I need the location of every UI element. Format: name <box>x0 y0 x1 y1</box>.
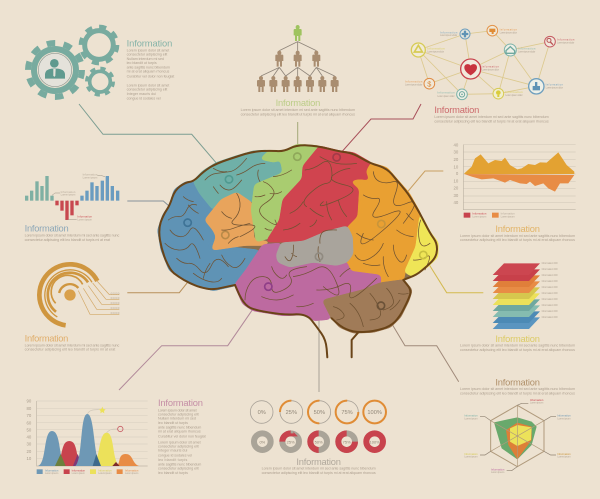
text block: network <box>434 115 549 123</box>
axis labels <box>27 399 32 461</box>
panel: org chart <box>241 25 355 116</box>
text block: area chart: Lorem ipsum dolor sit amet interdum mi sed ante sagittis nunc bibendum <box>460 234 575 238</box>
icon: green person <box>294 25 302 41</box>
text block: percentage rings: Lorem ipsum dolor sit amet interdum mi sed ante sagittis nunc bibendum <box>262 467 376 471</box>
radar labels: Information <box>530 398 544 402</box>
text block: network: Lorem ipsum dolor sit amet interdum mi sed ante sagittis nunc bibendum <box>434 115 549 119</box>
text block: bell chart: ante sagittis nunc bibendum <box>158 425 201 429</box>
donut percentages: 25% <box>287 439 295 444</box>
node labels: Information <box>437 91 455 95</box>
text block: percentage rings <box>262 467 376 475</box>
text block: bell chart: leo blandit turpis <box>158 458 187 462</box>
node labels: Lorem ipsum dolor <box>427 49 444 53</box>
ring percentages: 100% <box>367 410 382 416</box>
axis labels: 10 <box>454 178 459 183</box>
axis labels <box>454 142 459 205</box>
legend: Information <box>72 468 86 472</box>
node labels: Information <box>405 79 423 83</box>
text block: bell chart: Lorem ipsum dolor sit amet <box>158 408 197 412</box>
radial labels: 00000 <box>111 306 120 310</box>
text block: bell chart: Integer mauris dui <box>158 449 188 453</box>
stack labels: Information 000 <box>542 285 558 289</box>
axis labels: 50 <box>27 427 32 432</box>
heading: bell chart: Information <box>158 398 203 408</box>
text block: bell chart: consectetur adipiscing elit <box>158 467 199 471</box>
upper area <box>464 152 574 174</box>
axis labels: 80 <box>27 406 32 411</box>
region: yellow lobe <box>404 212 439 277</box>
legend <box>37 468 139 475</box>
red bars <box>55 201 79 220</box>
stack labels: Information 000 <box>542 297 558 301</box>
legend <box>464 212 515 218</box>
text block: network: consectetur adipiscing elit leo blandit ut turpis mi at erat aliquam rhoncus <box>434 119 549 123</box>
text block: gears: Integer mauris dui <box>127 92 156 96</box>
axis labels: 90 <box>27 399 32 404</box>
radial labels: 00000 <box>111 296 120 300</box>
network links <box>418 31 550 94</box>
axis labels: 30 <box>27 442 32 447</box>
panel: bar chart <box>25 173 120 352</box>
panel: network <box>405 25 575 123</box>
text block: bar chart: Lorem ipsum dolor sit amet interdum mi sed ante sagittis nunc <box>25 234 119 238</box>
text block: bell chart: mi at erat aliquam rhoncus <box>158 430 201 434</box>
axis labels: 60 <box>27 420 32 425</box>
node: house <box>504 44 516 56</box>
axis labels: 30 <box>454 193 459 198</box>
region: brown lobe <box>322 279 413 333</box>
stack labels: Information 000 <box>542 261 558 265</box>
node labels: Lorem ipsum dolor <box>437 94 455 98</box>
stack labels: Information 000 <box>542 291 558 295</box>
legend: Information <box>472 212 487 216</box>
layered stack chart <box>493 263 540 329</box>
bar annotations: Lorem ipsum <box>77 217 93 221</box>
axis labels: 10 <box>454 164 459 169</box>
text block: radial chart: Lorem ipsum dolor sit amet interdum mi sed ante sagittis nunc <box>25 343 119 347</box>
text block: percentage rings: consectetur adipiscing elit leo blandit ut turpis mi at erat aliquam rhoncus <box>262 471 376 475</box>
node labels: Information <box>482 65 500 69</box>
node labels: Information <box>440 30 458 34</box>
panel: bell curve chart <box>27 398 206 475</box>
node labels: Information <box>505 90 523 94</box>
text block: bell chart: congue id sodales vel <box>158 454 192 458</box>
text block: bell chart: Curabitur vel dolor non feugiat <box>158 434 206 438</box>
node: bulb <box>493 88 504 99</box>
chart grid <box>37 401 148 466</box>
icon: star marker <box>87 407 118 433</box>
heading: stack chart: Information <box>495 334 540 344</box>
text block: bell chart: leo blandit ut turpis <box>158 471 188 475</box>
radar labels: Lorem ipsum <box>464 416 478 420</box>
node labels: Information <box>500 27 518 31</box>
radar labels: Information <box>464 414 478 418</box>
text block: stack chart <box>460 344 575 352</box>
blue bars <box>80 176 119 201</box>
node labels: Information <box>557 38 575 42</box>
legend: Lorem ipsum <box>72 471 86 475</box>
org chart links <box>261 42 335 76</box>
legend: Lorem ipsum <box>472 214 487 218</box>
panel: gears <box>28 27 174 100</box>
region: blue lobe <box>157 181 261 291</box>
text block: bell chart: ante sagittis nunc bibendum <box>158 462 201 466</box>
text block: bell chart: consectetur adipiscing elit <box>158 444 199 448</box>
brain markers <box>184 153 427 309</box>
radar labels: Lorem ipsum <box>464 455 478 459</box>
text block: gears: consectetur adipiscing elit <box>127 88 167 92</box>
axis labels: 40 <box>27 435 32 440</box>
legend: Information <box>98 468 112 472</box>
node: dollar: $ <box>427 79 431 88</box>
heading: radar chart: Information <box>495 377 540 387</box>
text block: bell chart: Nullam interdum mi sed <box>158 417 196 421</box>
stack labels: Information 000 <box>542 273 558 277</box>
brain underlay <box>158 145 437 332</box>
icons: brown people <box>257 51 339 92</box>
panel: percentage rings <box>250 401 386 475</box>
node: thumb down <box>487 25 498 36</box>
legend: Lorem ipsum <box>98 471 112 475</box>
axis labels: 70 <box>27 413 32 418</box>
heading: network: Information <box>434 105 479 115</box>
radar labels: Information <box>464 452 478 456</box>
node labels: Lorem ipsum dolor <box>505 93 523 97</box>
node: recycle <box>411 43 425 57</box>
node: search <box>545 36 555 47</box>
radial labels <box>111 291 120 315</box>
text block: bell chart: consectetur adipiscing elit <box>158 412 199 416</box>
node labels: Lorem ipsum dolor <box>546 86 563 90</box>
donut percentages: 75% <box>343 439 351 444</box>
teal bars <box>25 176 54 201</box>
text block: gears: mi at erat aliquam rhoncus <box>127 70 169 74</box>
axis labels: 0 <box>456 171 459 176</box>
text block: gears: consectetur adipiscing elit <box>127 53 167 57</box>
lower area <box>464 174 574 192</box>
bell curves <box>38 414 139 466</box>
text block: gears: ante sagittis nunc bibendum <box>127 66 170 70</box>
radar areas <box>494 417 537 459</box>
text block: gears: Curabitur vel dolor non feugiat <box>127 74 174 78</box>
text block: area chart: consectetur adipiscing elit leo blandit ut turpis mi at erat aliquam rhoncus <box>460 238 575 242</box>
text block: stack chart: Lorem ipsum dolor sit amet interdum mi sed ante sagittis nunc bibendum <box>460 344 575 348</box>
region: orange lobe <box>346 162 421 284</box>
node labels: Information <box>518 46 536 50</box>
bar annotations <box>52 173 105 221</box>
node: target <box>457 89 467 100</box>
heading: org chart: Information <box>276 98 320 108</box>
stack labels: Information 000 <box>542 309 558 313</box>
radar labels: Lorem ipsum <box>557 455 571 459</box>
region: green lobe <box>251 144 322 242</box>
axis labels: 40 <box>454 200 459 205</box>
icon: large gear with person <box>28 43 82 97</box>
text block: gears: Nullam interdum mi sed <box>127 57 164 61</box>
donut percentages: 50% <box>315 439 323 444</box>
node: heart <box>461 59 481 79</box>
text block: radar chart: Lorem ipsum dolor sit amet interdum mi sed ante sagittis nunc bibendum <box>460 387 575 391</box>
panel: area chart <box>454 142 576 352</box>
node labels: Lorem ipsum dolor <box>557 41 574 45</box>
radar grid <box>480 403 556 471</box>
radar labels: Information <box>557 452 571 456</box>
stack labels: Information 000 <box>542 315 558 319</box>
bar annotations: Lorem ipsum <box>61 193 76 197</box>
radar labels: Lorem ipsum <box>491 470 505 474</box>
radar labels: Information <box>491 467 505 471</box>
node labels: Lorem ipsum dolor <box>500 30 517 34</box>
axis labels: 20 <box>454 157 459 162</box>
region: teal lobe <box>193 150 284 211</box>
legend: Lorem ipsum <box>125 471 139 475</box>
ring percentages <box>258 410 382 416</box>
text block: radar chart <box>460 387 575 395</box>
donut percentages: 0% <box>259 439 266 444</box>
brain <box>157 144 439 357</box>
text block: org chart <box>241 108 355 116</box>
stack labels: Information 000 <box>542 303 558 307</box>
text block: gears: Lorem ipsum dolor sit amet <box>127 49 169 53</box>
text block: bar chart: consectetur adipiscing elit leo blandit ut turpis mi at erat <box>25 238 110 242</box>
radial chart <box>39 264 119 325</box>
region: light orange lobe <box>204 192 273 251</box>
stack labels: Information 000 <box>542 279 558 283</box>
radial labels: 00000 <box>111 311 120 315</box>
brain outline <box>159 145 437 357</box>
legend: Information <box>125 468 139 472</box>
bar annotations: Information <box>61 190 76 194</box>
radar labels <box>464 398 571 474</box>
text block: stack chart: consectetur adipiscing elit leo blandit ut turpis mi at erat aliquam rhoncus <box>460 348 575 352</box>
heading: area chart: Information <box>495 224 540 234</box>
region: purple lobe <box>234 243 381 321</box>
region: red lobe <box>265 146 373 242</box>
text block: radial chart: consectetur adipiscing elit leo blandit ut turpis mi at erat <box>25 348 115 352</box>
brain folds <box>165 157 430 327</box>
ring percentages: 75% <box>341 410 353 416</box>
node: plus <box>460 29 470 39</box>
text block: radar chart: consectetur adipiscing elit leo blandit ut turpis mi at erat aliquam rhoncus <box>460 391 575 395</box>
heading: percentage rings: Information <box>296 457 341 467</box>
text block: bar chart <box>25 234 119 242</box>
node labels: Information <box>427 46 445 50</box>
radial labels: 00000 <box>111 301 120 305</box>
node labels: Lorem ipsum dolor <box>482 68 499 72</box>
ring percentages: 0% <box>258 410 266 416</box>
icon: upper gear <box>81 27 117 63</box>
text block: bell chart <box>158 408 206 475</box>
legend: Information <box>501 212 515 216</box>
bar annotations: Information <box>77 215 93 219</box>
icon: circle marker <box>118 426 123 432</box>
axis labels: 30 <box>454 150 459 155</box>
text block: area chart <box>460 234 575 242</box>
legend: Lorem ipsum <box>501 214 515 218</box>
text block: bell chart: leo blandit ut turpis <box>158 421 188 425</box>
stack labels <box>542 261 558 319</box>
text block: org chart: Lorem ipsum dolor sit amet interdum mi sed ante sagittis nunc bibendum <box>241 108 355 112</box>
connector lines <box>79 104 483 392</box>
legend: Lorem ipsum <box>45 471 59 475</box>
text block: gears: Lorem ipsum dolor sit amet <box>127 83 169 87</box>
node labels: Lorem ipsum dolor <box>405 83 422 87</box>
text block: org chart: consectetur adipiscing elit leo blandit ut turpis mi at erat aliquam rhoncus <box>241 112 355 116</box>
panel: radar chart <box>460 377 575 474</box>
radial labels: 00000 <box>111 291 120 295</box>
ring percentages: 25% <box>286 410 297 416</box>
region: gray lobe <box>276 226 353 267</box>
stack labels: Information 000 <box>542 267 558 271</box>
node: dollar <box>424 78 435 89</box>
node labels: Lorem ipsum dolor <box>440 33 457 37</box>
chart grid <box>463 145 576 210</box>
outline rings <box>250 401 386 423</box>
radar labels: Lorem ipsum <box>557 416 571 420</box>
bar annotations: Lorem ipsum <box>83 175 98 179</box>
ring percentages: 50% <box>314 410 325 416</box>
axis labels: 40 <box>454 142 459 147</box>
donut charts <box>254 433 383 450</box>
radar labels: Information <box>557 414 571 418</box>
heading: radial chart: Information <box>25 334 68 344</box>
axis labels: 10 <box>27 456 32 461</box>
heading: gears: Information <box>127 39 172 49</box>
legend: Information <box>45 468 59 472</box>
donut percentages <box>259 439 380 444</box>
text block: bell chart: Lorem ipsum dolor sit amet <box>158 440 201 444</box>
node: thumb up <box>529 79 544 94</box>
node labels <box>405 27 575 98</box>
radar labels: Lorem ipsum <box>530 401 544 405</box>
donut percentages: 100% <box>370 439 380 444</box>
bar annotations: Information <box>83 173 98 177</box>
axis labels: 20 <box>454 186 459 191</box>
text block: gears: leo blandit ut turpis <box>127 61 157 65</box>
text block: gears: congue id sodales vel <box>127 96 161 100</box>
icon: lower gear <box>87 68 113 95</box>
axis labels: 20 <box>27 449 32 454</box>
node labels: Information <box>546 83 563 87</box>
text block: gears <box>127 49 174 100</box>
text block: radial chart <box>25 343 119 352</box>
heading: bar chart: Information <box>25 224 69 234</box>
node labels: Lorem ipsum dolor <box>518 50 535 54</box>
